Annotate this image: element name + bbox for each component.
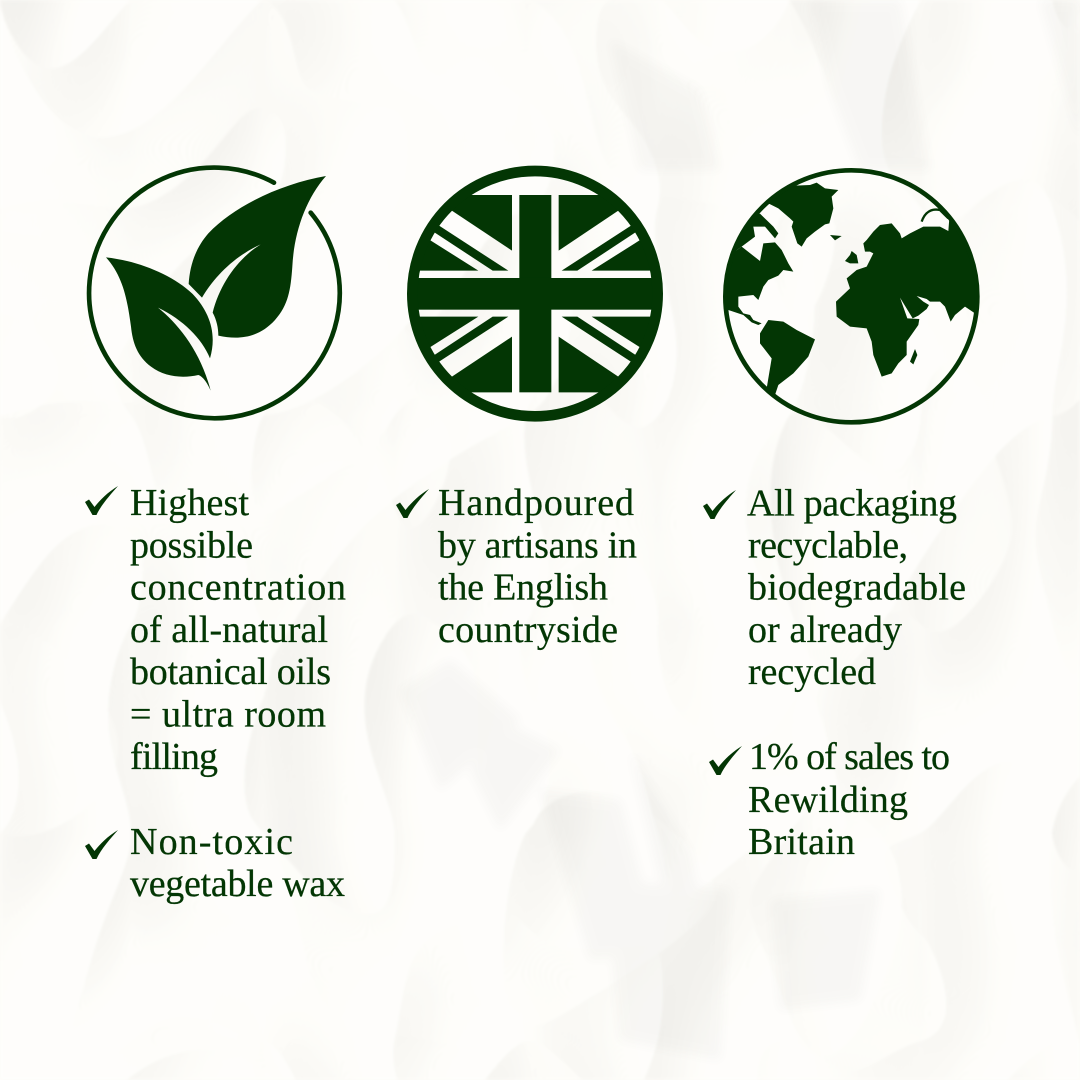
check mark [703,490,736,519]
ring around leaves [89,168,340,418]
bullet: handpoured: by artisans in [438,524,637,566]
bullet: rewilding [748,736,950,863]
bullet: handpoured: countryside [438,609,618,651]
bullet: packaging: recyclable, [748,524,908,566]
globe ring [725,170,977,422]
bullet: rewilding: 1% of sales to [749,736,950,778]
text column: natural ingredients [85,482,346,905]
bullet: packaging [747,482,966,693]
flag ring [412,171,658,416]
check mark [85,830,118,859]
bullet: botanical oils: Highest [130,482,249,524]
bullet: handpoured: Handpoured [438,482,634,524]
bullet: packaging: or already [748,609,902,651]
check mark [85,486,118,515]
bullet: botanical oils: of all-natural [130,609,328,651]
large leaf [189,176,326,338]
bullet: packaging: All packaging [747,482,957,524]
bullet: rewilding: Rewilding [748,779,908,821]
bullet: botanical oils: botanical oils [130,651,331,693]
bullet: botanical oils [130,482,346,778]
bullet: rewilding: Britain [748,821,855,863]
bullet: vegetable wax: vegetable wax [130,863,345,905]
bullet: vegetable wax: Non-toxic [130,821,293,863]
continents [717,183,987,395]
bullet: botanical oils: concentration [130,567,346,609]
bullet: botanical oils: = ultra room [130,694,326,736]
small leaf [106,257,213,391]
bullet: botanical oils: filling [130,736,218,778]
icon: globe [717,170,987,422]
bullet: packaging: recycled [748,651,876,693]
bullet: vegetable wax [130,821,345,905]
bullet: botanical oils: possible [130,524,253,566]
flag field [408,195,662,392]
text column: sustainability [703,482,966,863]
icon: leaves in a circle [89,168,340,418]
text column: handpoured [396,482,637,651]
icon: Union Jack in a circle [408,171,662,416]
bullet: handpoured: the English [438,567,608,609]
check mark [396,489,429,518]
check mark [709,746,742,775]
bullet: handpoured [438,482,637,651]
bullet: packaging: biodegradable [748,566,966,608]
